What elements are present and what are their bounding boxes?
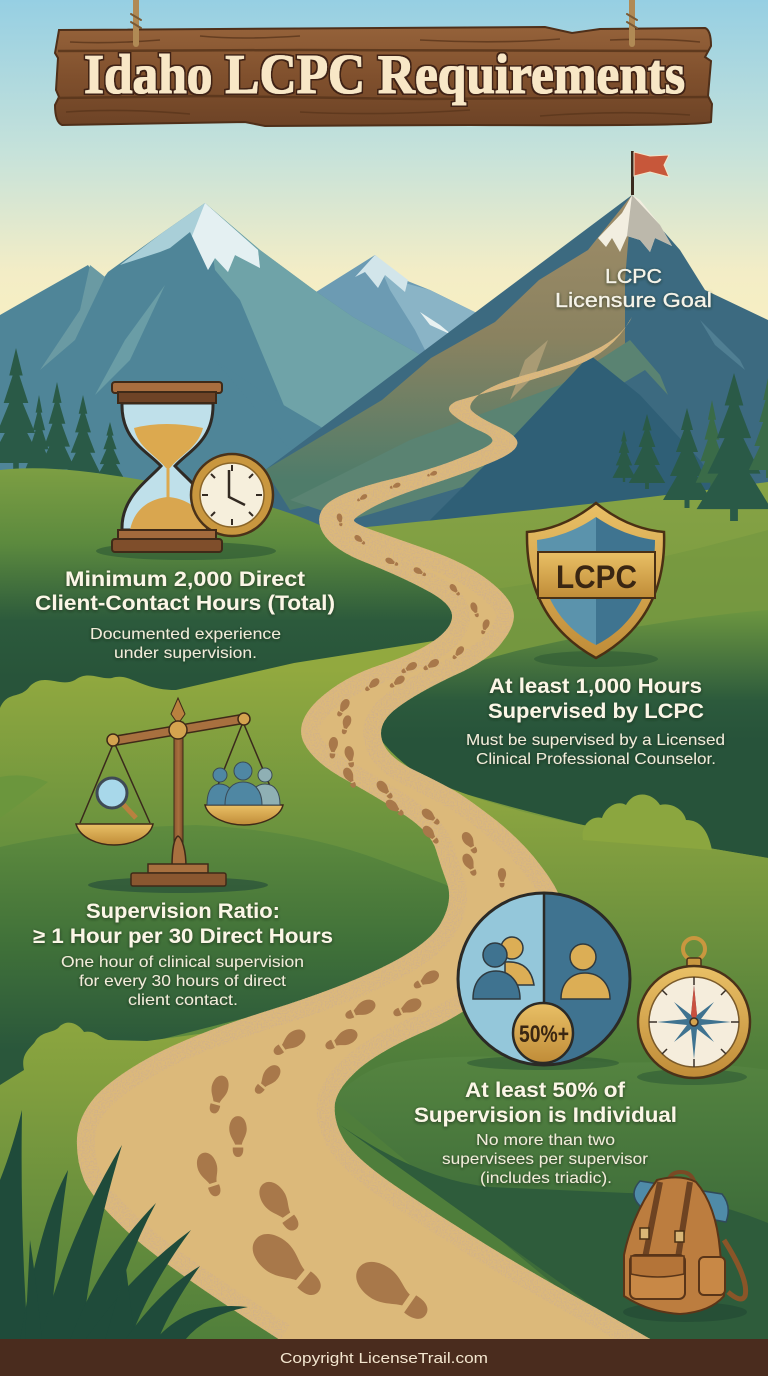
text: 2,000 direct client-contact hours: Documented experience	[90, 626, 281, 643]
bedroll	[634, 1181, 728, 1222]
text: supervision ratio: Supervision Ratio:	[86, 900, 280, 923]
group of people	[207, 762, 280, 805]
icon: backpack	[623, 1172, 747, 1322]
title: Idaho LCPC Requirements	[84, 44, 685, 106]
text: 50 percent individual supervision	[414, 1079, 677, 1187]
text: supervision ratio: for every 30 hours of direct	[79, 973, 287, 990]
ropes	[131, 0, 637, 44]
text: 50 percent individual supervision: supervisees per supervisor	[442, 1151, 649, 1168]
icon: individual supervision circle	[458, 893, 630, 1070]
text: 50 percent individual supervision: No more than two	[476, 1132, 615, 1149]
text: 1,000 hours supervised by LCPC: At least 1,000 Hours	[489, 675, 702, 698]
50% badge	[513, 1003, 573, 1063]
text: 2,000 direct client-contact hours: Client-Contact Hours (Total)	[35, 592, 335, 615]
bush	[583, 794, 712, 850]
50% badge: 50%+	[519, 1021, 569, 1048]
icon: balance scale	[76, 698, 283, 893]
green hills	[0, 468, 768, 1340]
text: 2,000 direct client-contact hours: under supervision.	[114, 645, 257, 662]
text: 50 percent individual supervision: At least 50% of	[465, 1079, 626, 1102]
text: 1,000 hours supervised by LCPC: Must be supervised by a Licensed	[466, 732, 725, 749]
icon: compass	[637, 938, 750, 1085]
two people	[473, 937, 534, 999]
icon: LCPC shield	[527, 503, 664, 667]
text: 50 percent individual supervision: Supervision is Individual	[414, 1104, 677, 1127]
sky background	[0, 0, 768, 340]
magnifying glass	[97, 778, 136, 818]
winding trail	[77, 317, 652, 1340]
text: supervision ratio: One hour of clinical supervision	[61, 954, 304, 971]
wooden title sign	[55, 0, 712, 126]
sign board	[55, 27, 712, 126]
goal label	[555, 266, 712, 312]
text: 2,000 direct client-contact hours	[35, 568, 335, 662]
flag	[631, 151, 669, 195]
one person	[561, 944, 610, 999]
text: 1,000 hours supervised by LCPC: Supervised by LCPC	[488, 700, 704, 723]
text: 2,000 direct client-contact hours: Minimum 2,000 Direct	[65, 568, 305, 591]
pine trees right	[612, 373, 768, 521]
goal label: Licensure Goal	[555, 290, 712, 312]
text: 1,000 hours supervised by LCPC	[466, 675, 725, 768]
icon: hourglass and clock	[96, 382, 276, 560]
footer bar	[0, 1339, 768, 1376]
pine trees left	[0, 348, 124, 484]
footer bar: Copyright LicenseTrail.com	[280, 1350, 488, 1367]
text: supervision ratio	[33, 900, 333, 1009]
background mountains	[0, 203, 500, 500]
clock	[191, 454, 273, 536]
text: 1,000 hours supervised by LCPC: Clinical Professional Counselor.	[476, 751, 716, 768]
text: supervision ratio: ≥ 1 Hour per 30 Direct Hours	[33, 925, 333, 948]
text: 50 percent individual supervision: (includes triadic).	[480, 1170, 612, 1187]
text: supervision ratio: client contact.	[128, 992, 238, 1009]
foreground grass	[0, 1110, 248, 1340]
shield band: LCPC	[556, 559, 637, 595]
footprints along the trail	[194, 470, 506, 1329]
goal label: LCPC	[605, 266, 662, 288]
shield band	[538, 552, 655, 598]
summit mountain with goal flag	[265, 151, 768, 540]
